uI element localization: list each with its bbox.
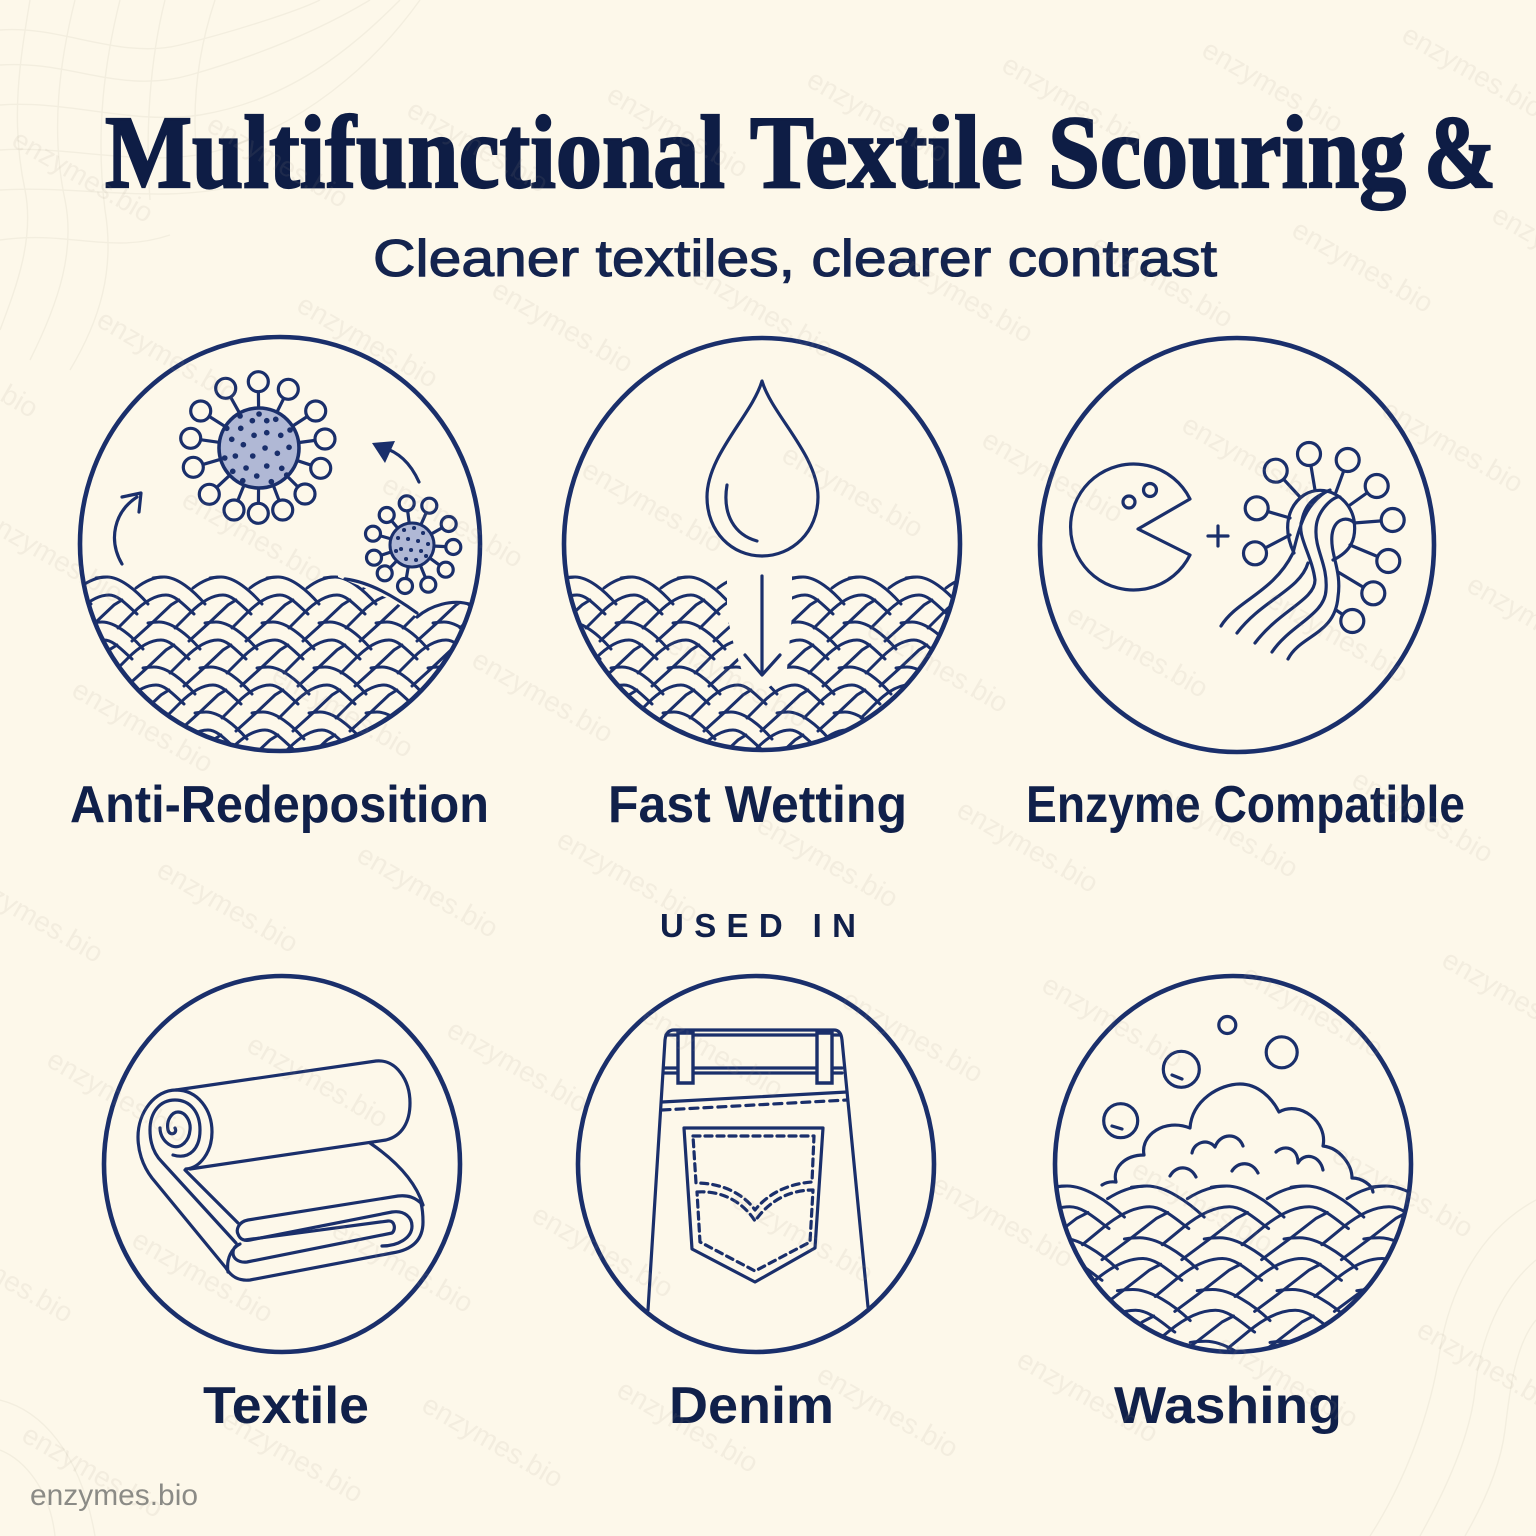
circle outline <box>1055 976 1411 1352</box>
section heading: used in: USED IN <box>660 907 856 944</box>
watermark pattern: enzymes.bio <box>1237 958 1389 1064</box>
subtitle: Cleaner textiles, clearer contrast <box>373 230 1218 288</box>
arrow: lift-off right <box>372 441 419 482</box>
watermark pattern: enzymes.bio <box>177 483 329 589</box>
watermark pattern: enzymes.bio <box>1062 598 1214 704</box>
watermark pattern: enzymes.bio <box>952 793 1104 899</box>
watermark pattern: enzymes.bio <box>1037 968 1189 1074</box>
panel: denim <box>578 976 934 1352</box>
title: Scouring <box>1048 95 1406 210</box>
plus sign <box>1208 526 1228 546</box>
watermark pattern: enzymes.bio <box>1177 408 1329 514</box>
watermark pattern: enzymes.bio <box>17 1418 169 1524</box>
watermark pattern: enzymes.bio <box>862 613 1014 719</box>
label: textile: Textile <box>203 1377 369 1435</box>
watermark pattern: enzymes.bio <box>292 288 444 394</box>
watermark pattern: enzymes.bio <box>42 1043 194 1149</box>
fabric weave <box>568 576 954 748</box>
watermark pattern: enzymes.bio <box>812 1358 964 1464</box>
watermark pattern: enzymes.bio <box>1087 228 1239 334</box>
watermark pattern: enzymes.bio <box>837 983 989 1089</box>
watermark pattern: enzymes.bio <box>352 838 504 944</box>
watermark pattern: enzymes.bio <box>1012 1343 1164 1449</box>
watermark pattern: enzymes.bio <box>977 423 1129 529</box>
watermark pattern: enzymes.bio <box>327 1213 479 1319</box>
watermark pattern: enzymes.bio <box>442 1013 594 1119</box>
watermark pattern: enzymes.bio <box>217 1403 369 1509</box>
watermark pattern: enzymes.bio <box>377 468 529 574</box>
watermark pattern: enzymes.bio <box>927 1168 1079 1274</box>
watermark pattern: enzymes.bio <box>662 628 814 734</box>
icon: foam <box>1102 1084 1373 1192</box>
watermark pattern: enzymes.bio <box>1262 583 1414 689</box>
watermark pattern: enzymes.bio <box>752 808 904 914</box>
fabric weave <box>86 576 470 749</box>
watermark pattern: enzymes.bio <box>467 643 619 749</box>
watermark pattern: enzymes.bio <box>527 1198 679 1304</box>
watermark pattern: enzymes.bio <box>1127 1153 1279 1259</box>
icon: water drop <box>707 381 818 556</box>
watermark pattern: enzymes.bio <box>1377 393 1529 499</box>
watermark pattern: enzymes.bio <box>127 1223 279 1329</box>
label: anti-redeposition: Anti-Redeposition <box>70 776 489 834</box>
small soil particle <box>366 496 461 594</box>
circle outline <box>578 976 934 1352</box>
circle outline <box>104 976 460 1352</box>
label: washing: Washing <box>1114 1377 1342 1435</box>
watermark pattern: enzymes.bio <box>417 1388 569 1494</box>
watermark pattern: enzymes.bio <box>577 453 729 559</box>
watermark pattern: enzymes.bio <box>552 823 704 929</box>
watermark pattern: enzymes.bio <box>1287 213 1439 319</box>
circle outline <box>564 338 960 750</box>
panel: textile <box>104 976 460 1352</box>
gap in fabric <box>727 565 792 690</box>
title: Multifunctional <box>105 95 725 210</box>
watermark pattern: enzymes.bio <box>1197 33 1349 139</box>
icon: rolled towel <box>138 1061 423 1280</box>
watermark pattern: enzymes.bio <box>7 123 159 229</box>
watermark pattern: enzymes.bio <box>887 243 1039 349</box>
panel: enzyme compatible <box>1040 338 1434 752</box>
watermark pattern: enzymes.bio <box>1152 778 1304 884</box>
watermark pattern: enzymes.bio <box>1347 763 1499 869</box>
watermark pattern: enzymes.bio <box>687 258 839 364</box>
panel: anti-redeposition <box>78 334 482 754</box>
watermark pattern: enzymes.bio <box>92 303 244 409</box>
watermark pattern: enzymes.bio <box>612 1373 764 1479</box>
watermark pattern: enzymes.bio <box>242 1028 394 1134</box>
title <box>105 95 1496 210</box>
watermark pattern: enzymes.bio <box>602 78 754 184</box>
label: enzyme compatible: Enzyme Compatible <box>1026 776 1465 834</box>
watermark pattern: enzymes.bio <box>267 658 419 764</box>
circle outline <box>1040 338 1434 752</box>
watermark pattern: enzymes.bio <box>152 853 304 959</box>
icon: bubbles <box>1104 1016 1297 1138</box>
arrow: lift-off left <box>115 493 141 564</box>
footer brand: enzymes.bio <box>30 1479 198 1512</box>
watermark pattern: enzymes.bio <box>997 48 1149 154</box>
watermark pattern: enzymes.bio <box>777 438 929 544</box>
icon: jeans pocket <box>648 1030 868 1310</box>
watermark pattern: enzymes.bio <box>402 93 554 199</box>
fabric weave <box>1058 1184 1407 1350</box>
watermark pattern: enzymes.bio <box>802 63 954 169</box>
icon: soil fibre particle <box>1221 442 1404 659</box>
watermark pattern: enzymes.bio <box>487 273 639 379</box>
circle outline <box>80 337 480 751</box>
title: Textile <box>750 95 1023 210</box>
title: & <box>1424 95 1496 210</box>
panel: washing <box>1052 974 1414 1354</box>
watermark pattern: enzymes.bio <box>727 1183 879 1289</box>
icon: enzyme pac-man <box>1071 464 1190 590</box>
label: denim: Denim <box>669 1377 834 1435</box>
watermark pattern: enzymes.bio <box>637 998 789 1104</box>
watermark pattern: enzymes.bio <box>67 673 219 779</box>
watermark pattern: enzymes.bio <box>202 108 354 214</box>
arrow: down <box>745 576 780 675</box>
watermark pattern: enzymes.bio <box>1212 1328 1364 1434</box>
panel: fast wetting <box>562 336 962 752</box>
watermark pattern: enzymes.bio <box>1327 1138 1479 1244</box>
label: fast wetting: Fast Wetting <box>608 776 907 834</box>
large soil particle <box>181 372 335 523</box>
